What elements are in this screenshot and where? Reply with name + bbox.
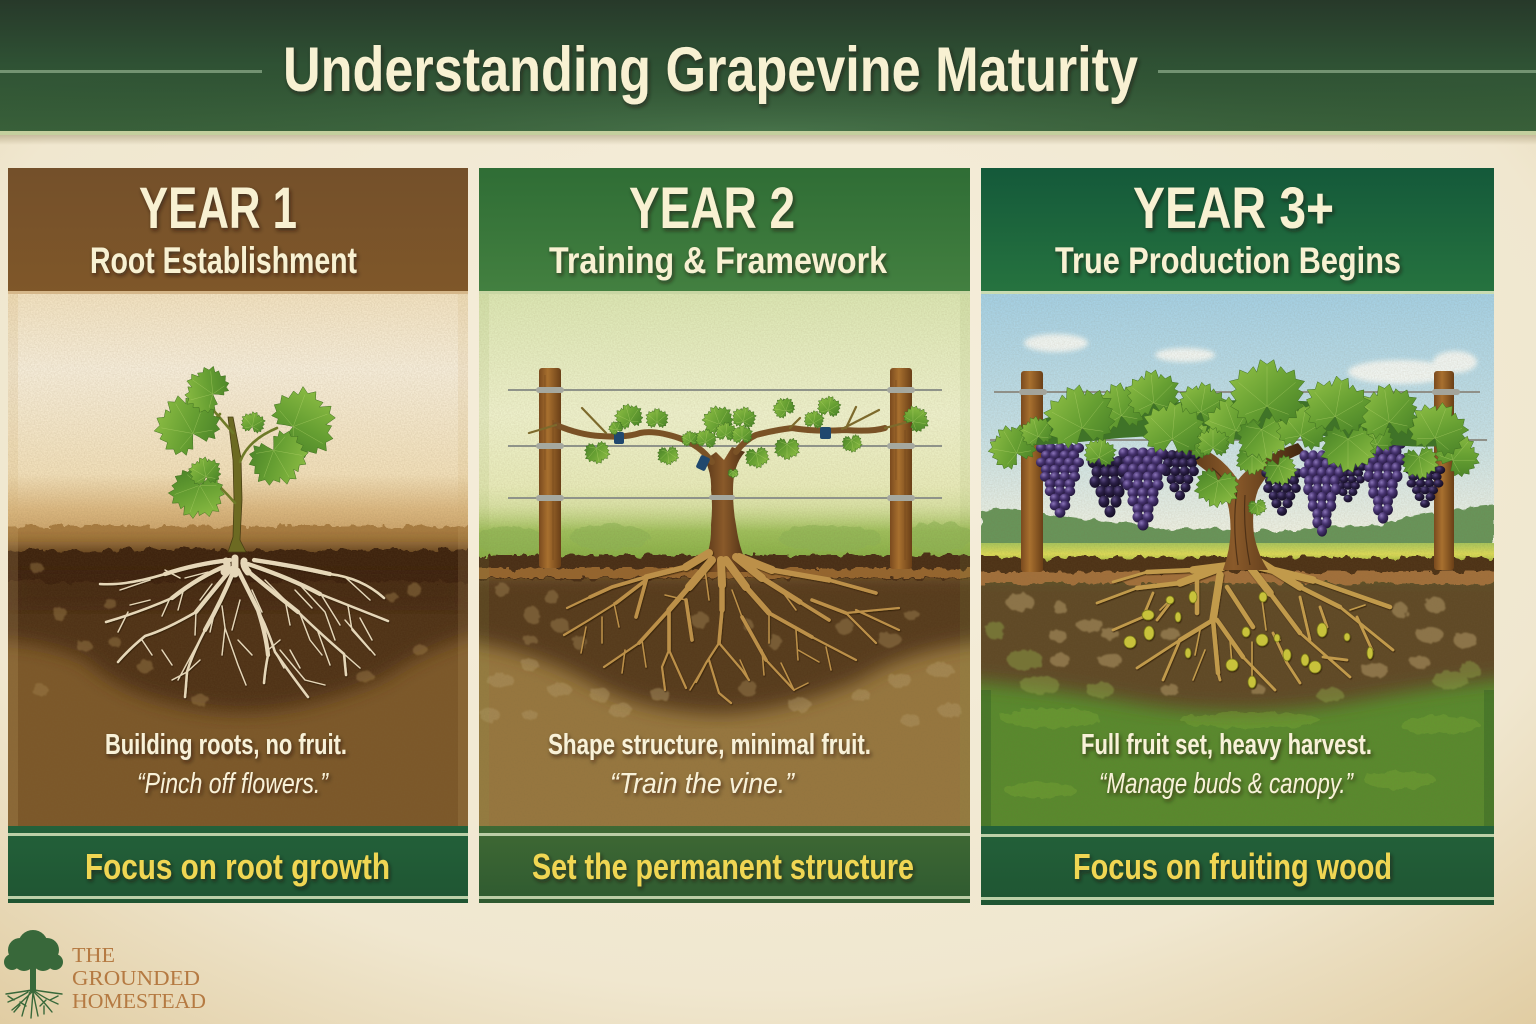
year 2 label: YEAR 2: [629, 176, 795, 241]
year 2 trellis posts and wires: [508, 368, 942, 569]
year 3 label: YEAR 3+: [1133, 176, 1334, 241]
logo: The Grounded Homestead: [4, 930, 206, 1018]
year 1 quote: “Pinch off flowers.”: [137, 768, 329, 800]
year 2 footer: [479, 826, 970, 903]
year 3 roots: [1097, 560, 1393, 690]
year 1 description: Building roots, no fruit.: [105, 729, 347, 761]
year 3 focus: Focus on fruiting wood: [1073, 846, 1392, 887]
panel: year 3+: [960, 168, 1520, 905]
year 1 seedling: [145, 359, 345, 552]
year 3 illustration: [960, 294, 1520, 832]
year 2 vine: [529, 394, 934, 572]
brand name: GROUNDED: [72, 966, 200, 990]
year 1 label: YEAR 1: [139, 176, 297, 241]
year 3 footer: [981, 826, 1494, 905]
year 2 description: Shape structure, minimal fruit.: [548, 729, 871, 761]
year 3 subtitle: True Production Begins: [1055, 240, 1401, 281]
brand name: [72, 943, 206, 1013]
icon: tree with roots: [4, 930, 63, 1018]
year 2 illustration: [460, 294, 990, 832]
year 2 subtitle: Training & Framework: [549, 240, 887, 281]
header banner: [0, 0, 1536, 145]
year 3 description: Full fruit set, heavy harvest.: [1081, 729, 1372, 761]
year 1 subtitle: Root Establishment: [90, 240, 357, 281]
year 2 header: [479, 168, 970, 292]
year 2 focus: Set the permanent structure: [532, 846, 914, 887]
brand name: THE: [72, 943, 115, 967]
year 3 grape clusters: [1036, 437, 1445, 537]
year 1 roots: [100, 558, 388, 697]
title: Understanding Grapevine Maturity: [283, 35, 1138, 105]
brand name: HOMESTEAD: [72, 989, 206, 1013]
panel: year 2: [460, 168, 990, 903]
year 3 vine trunk: [1175, 442, 1305, 570]
year 2 roots: [564, 553, 899, 703]
year 2 quote: “Train the vine.”: [610, 768, 795, 800]
year 1 footer: [8, 826, 468, 903]
year 1 header: [8, 168, 468, 292]
year 1 focus: Focus on root growth: [85, 846, 390, 887]
year 3 canopy: [981, 360, 1488, 517]
year 3 trellis posts and wires: [990, 371, 1487, 572]
year 3 quote: “Manage buds & canopy.”: [1099, 768, 1354, 800]
panel: year 1: [0, 168, 500, 903]
year 1 illustration: [0, 294, 500, 832]
year 3 header: [981, 168, 1494, 292]
